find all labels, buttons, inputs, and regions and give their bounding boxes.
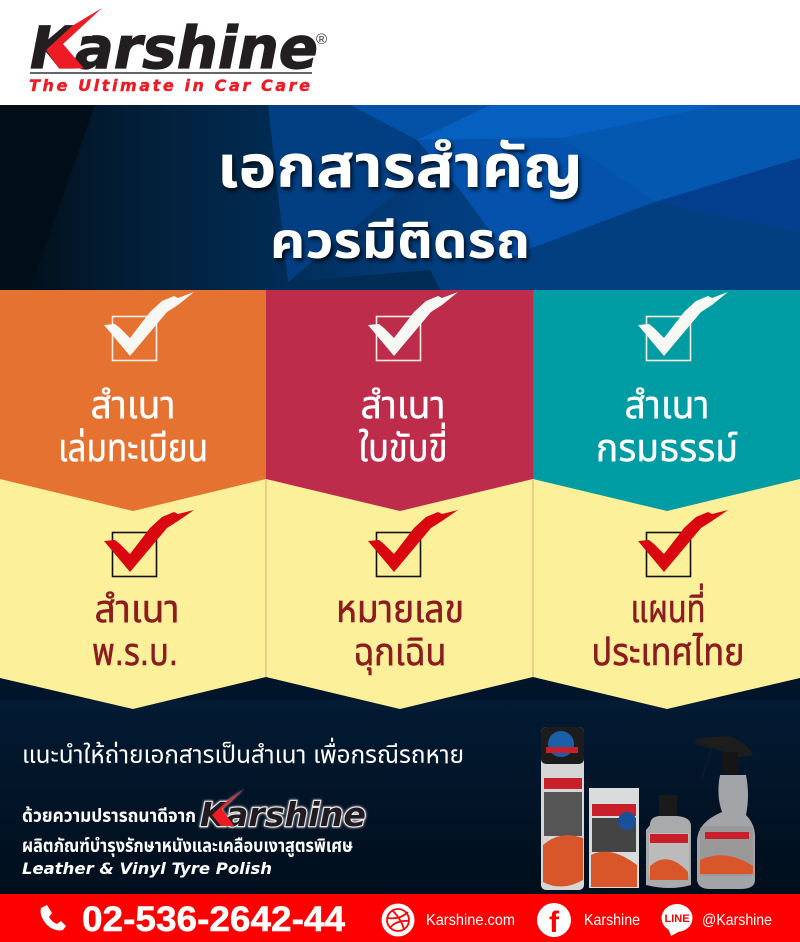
panel: crimson (266, 290, 533, 511)
website: Karshine.com (426, 912, 515, 929)
label: map of Thailand: ประเทศไทย (592, 632, 744, 674)
product: small bottle (646, 795, 691, 888)
icon: red check 1 (104, 510, 194, 576)
label: copy of registration book: เล่มทะเบียน (58, 428, 208, 470)
header background (0, 0, 800, 105)
title line 2: ควรมีติดรถ (270, 213, 530, 269)
title (217, 133, 583, 269)
logo red swoosh (46, 8, 102, 68)
facebook name: Karshine (584, 912, 640, 929)
product: spray can (541, 727, 584, 890)
icon: red check 3 (638, 510, 728, 576)
panel: orange (0, 290, 266, 511)
icon: phone (41, 905, 66, 930)
label: copy of registration book: สำเนา (90, 385, 176, 427)
logo knockout above K arm (62, 8, 103, 44)
label: copy of insurance policy: กรมธรรม์ (596, 428, 738, 470)
upper row labels (58, 385, 738, 470)
panel: yellow lower row (0, 470, 800, 709)
small Karshine logo (200, 789, 366, 834)
small logo swoosh (212, 789, 244, 826)
label: copy of compulsory insurance: พ.ร.บ. (92, 632, 178, 674)
label: emergency numbers: หมายเลข (336, 589, 464, 631)
icon: red check 2 (368, 510, 458, 576)
product: trigger spray bottle (695, 737, 755, 889)
product line English: Leather & Vinyl Tyre Polish (22, 859, 272, 878)
label: map of Thailand: แผนที่ (630, 583, 706, 631)
panel: teal (533, 290, 800, 511)
icon: white check 3 (638, 292, 728, 360)
icon: LINE: LINE (664, 913, 690, 925)
logo wordmark: Karshine (30, 14, 318, 82)
label: copy of driving licence: ใบขับขี่ (358, 422, 448, 470)
title line 1: เอกสารสำคัญ (217, 133, 583, 200)
icon: facebook: f (549, 906, 560, 939)
label: copy of insurance policy: สำเนา (624, 385, 710, 427)
small logo wordmark: Karshine (200, 795, 366, 834)
logo tagline: The Ultimate in Car Care (29, 76, 310, 95)
footer bar (0, 894, 800, 942)
icon: white check 2 (368, 292, 458, 360)
product: box (589, 788, 639, 888)
logo: Karshine (29, 8, 327, 95)
label: emergency numbers: ฉุกเฉิน (354, 632, 446, 675)
products image (541, 727, 755, 890)
sponsor line: ด้วยความปรารถนาดีจาก (22, 805, 196, 827)
advice text: แนะนำให้ถ่ายเอกสารเป็นสำเนา เพื่อกรณีรถหาย (22, 737, 464, 769)
icon: facebook (537, 903, 571, 939)
label: copy of driving licence: สำเนา (360, 385, 446, 427)
icon: LINE (662, 904, 692, 936)
LINE id: @Karshine (702, 912, 772, 929)
icon: white check 1 (104, 292, 194, 360)
icon: dribbble (382, 904, 414, 936)
logo registered mark: ® (316, 31, 327, 48)
phone number: 02-536-2642-44 (82, 900, 346, 939)
logo rule (30, 72, 312, 74)
label: copy of compulsory insurance: สำเนา (94, 589, 180, 631)
lower row labels (92, 583, 744, 675)
product line Thai: ผลิตภัณฑ์บำรุงรักษาหนังและเคลือบเงาสูตรพิเศษ (22, 836, 353, 857)
